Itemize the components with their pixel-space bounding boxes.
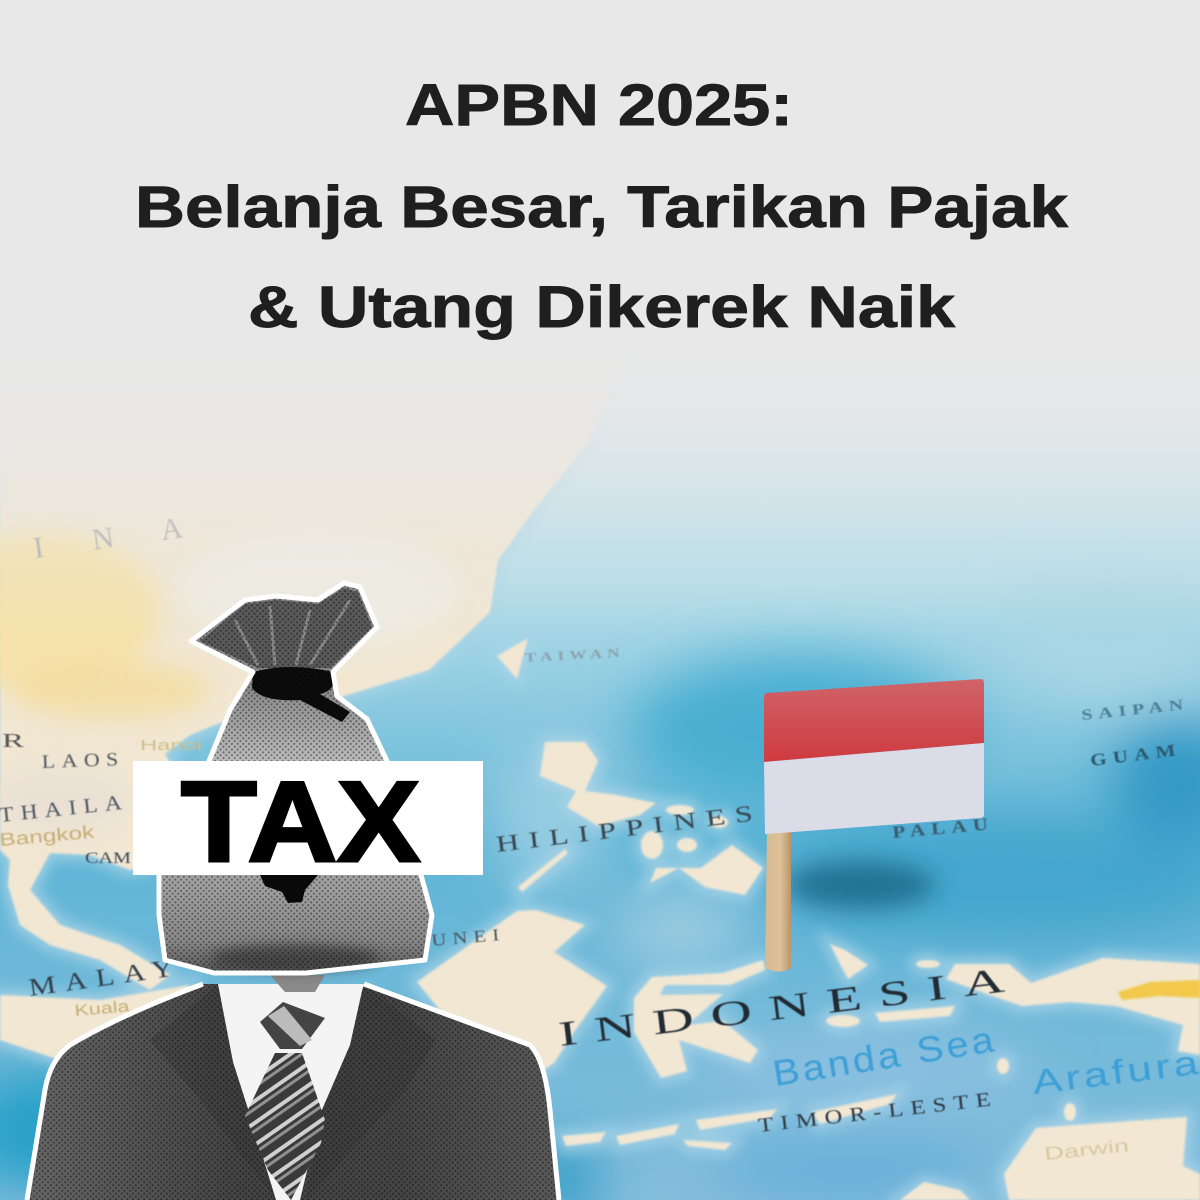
money bag <box>159 583 432 973</box>
map labels: Hanoi <box>140 737 202 754</box>
map of Southeast Asia <box>0 340 1200 1200</box>
map labels: SAIPAN <box>1081 697 1190 724</box>
map labels: I N A <box>31 511 185 565</box>
bag lower shade <box>210 944 380 972</box>
map labels: UNEI <box>431 925 506 950</box>
land tinting <box>0 530 460 830</box>
map labels: INDONESIA <box>556 958 1024 1054</box>
title: APBN 2025: <box>405 73 793 138</box>
map labels: Banda Sea <box>770 1018 999 1094</box>
top fade into grey <box>0 320 1200 640</box>
map labels: PALAU <box>892 814 995 842</box>
map labels: LAOS <box>41 749 125 773</box>
title: Belanja Besar, Tarikan Pajak <box>135 175 1069 240</box>
necktie <box>245 1002 325 1200</box>
title <box>135 73 1069 340</box>
map labels: HILIPPINES <box>495 799 764 857</box>
map labels: Darwin <box>1043 1135 1130 1164</box>
map labels: Kuala <box>74 998 130 1020</box>
dollar mark <box>260 875 318 903</box>
map labels: GUAM <box>1089 740 1183 770</box>
flag red stripe <box>764 679 984 762</box>
map labels: TIMOR-LESTE <box>757 1088 999 1137</box>
map labels: TAIWAN <box>524 645 625 665</box>
shirt <box>218 984 364 1200</box>
land masses <box>0 340 1200 1200</box>
TAX label <box>133 759 483 886</box>
map labels: Arafura <box>1030 1044 1200 1102</box>
map labels: THAILA <box>0 790 130 827</box>
map labels: R <box>2 730 25 752</box>
bag ruffle <box>200 588 372 668</box>
TAX label: TAX <box>181 759 420 886</box>
coastal shallows <box>0 340 1200 1200</box>
map labels: Bangkok <box>0 822 96 850</box>
cutout figure: businessman with tax bag head <box>27 583 559 1200</box>
sea <box>0 340 1200 1200</box>
icon: Indonesian flag on a pin <box>764 679 984 972</box>
title: & Utang Dikerek Naik <box>248 275 956 340</box>
map labels: MALAY <box>27 954 184 1002</box>
map labels: CAM <box>85 850 131 867</box>
neck <box>270 975 325 992</box>
flag shadow <box>785 861 935 909</box>
map labels <box>0 511 1200 1164</box>
suit <box>27 984 559 1200</box>
flag pole <box>765 825 791 972</box>
flag white stripe <box>764 743 984 834</box>
yellow highlands on Papua <box>1118 980 1200 1000</box>
bag knot <box>252 667 350 722</box>
